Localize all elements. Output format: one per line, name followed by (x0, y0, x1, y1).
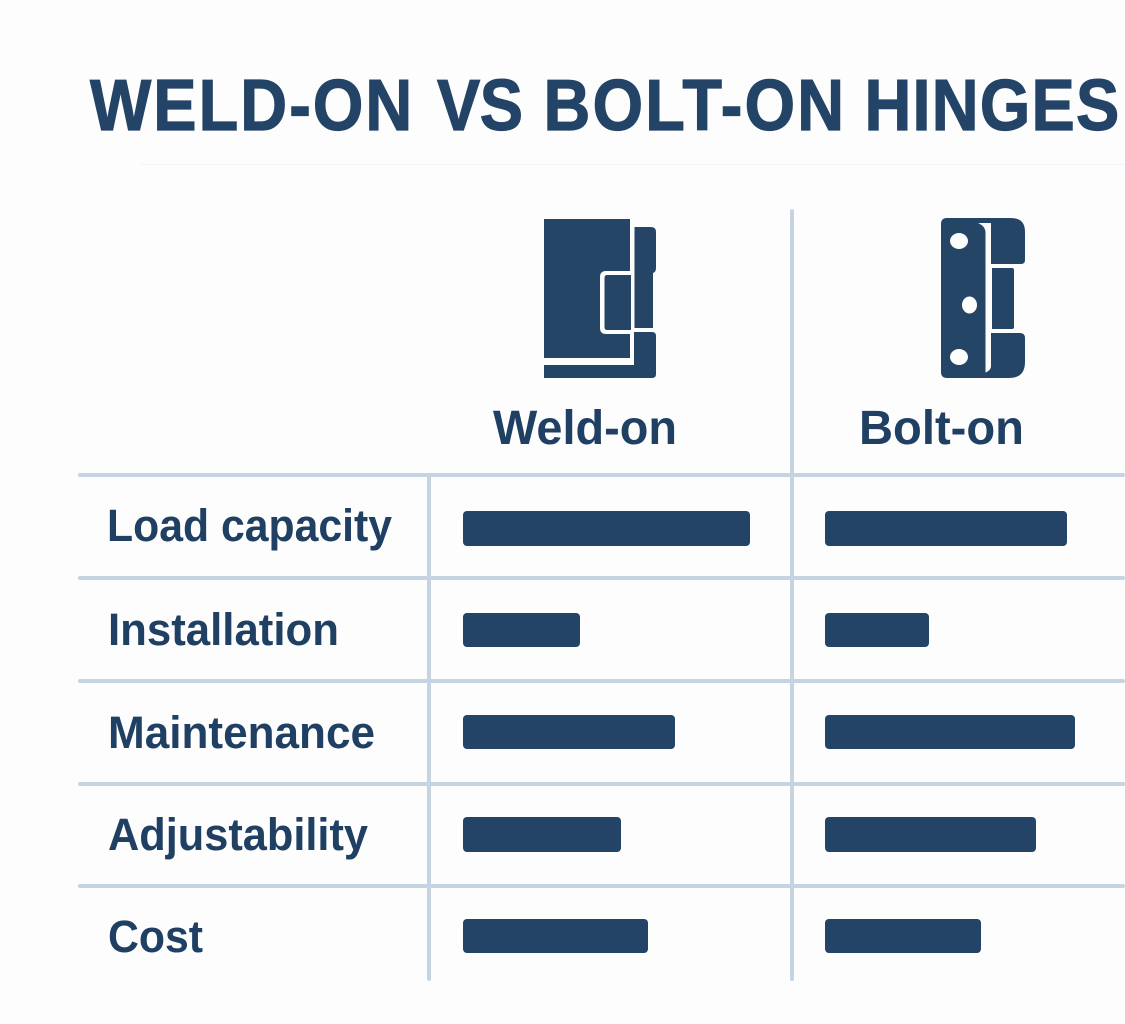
title: HINGES (864, 65, 1119, 146)
icon: weld-on hinge (544, 219, 656, 378)
row: Installation: Installation (108, 604, 339, 655)
row: Installation (108, 604, 929, 655)
row: Maintenance (108, 707, 1075, 758)
row: Adjustability (108, 809, 1036, 860)
column heading: Bolt-on: Bolt-on (859, 402, 1024, 455)
row: Adjustability: Adjustability (108, 809, 368, 860)
row: Cost (108, 911, 981, 962)
title: WELD-ON (90, 65, 412, 146)
column heading: Weld-on: Weld-on (493, 402, 677, 455)
title: VS (437, 65, 523, 146)
table grid (78, 209, 1125, 981)
title: BOLT-ON (544, 65, 844, 146)
icon: bolt-on hinge (941, 218, 1025, 378)
row: Cost: Cost (108, 911, 203, 962)
title (90, 65, 1119, 146)
row: Load capacity: Load capacity (107, 500, 392, 551)
row: Load capacity (107, 500, 1067, 551)
row: Maintenance: Maintenance (108, 707, 375, 758)
